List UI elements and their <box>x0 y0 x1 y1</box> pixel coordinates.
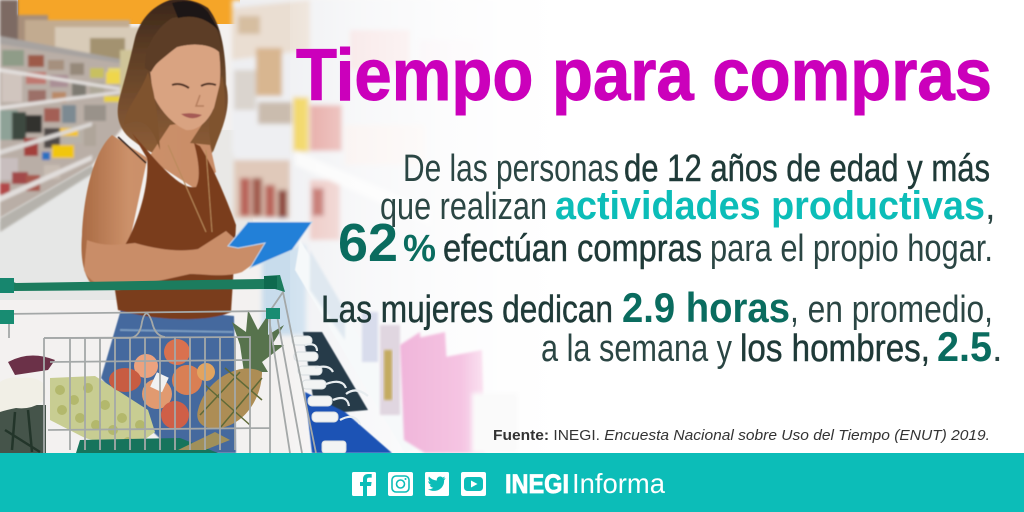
shoulder and chest skin <box>81 120 216 290</box>
text block: hours per week by sex: Las mujeres dedican <box>321 289 613 331</box>
logo: INEGI Informa: INEGI <box>505 469 569 499</box>
text block: productive activities statistic: De las personas <box>403 148 619 190</box>
text block: hours per week by sex <box>321 284 1003 370</box>
orange back wall <box>18 0 240 24</box>
icon: instagram <box>388 472 413 496</box>
back centre shelf <box>120 50 140 120</box>
pineapple <box>197 310 284 429</box>
source note: Fuente: INEGI. Encuesta Nacional sobre Uso del Tiempo (ENUT) 2019. <box>493 428 990 444</box>
text block: hours per week by sex: 2.5 <box>937 323 992 370</box>
floor <box>0 150 130 300</box>
icon: facebook <box>352 472 376 496</box>
forearm <box>84 231 268 290</box>
hair back <box>118 0 228 157</box>
facial features <box>172 84 216 88</box>
face <box>150 45 220 130</box>
necklace <box>168 145 212 232</box>
right shelves <box>232 0 560 453</box>
lilac and yellow products <box>362 312 378 362</box>
text block: hours per week by sex: a la semana y <box>541 328 732 370</box>
apples in bag <box>109 339 215 429</box>
text block: productive activities statistic: que realizan <box>380 186 547 228</box>
icon: youtube <box>461 472 486 496</box>
jeans <box>101 306 236 453</box>
text block: productive activities statistic: , <box>985 186 996 228</box>
blue package <box>228 222 312 268</box>
woman shopper <box>81 0 312 453</box>
lower aisle products: shelf, bottles <box>292 240 518 453</box>
jugs near cart <box>262 245 306 335</box>
white diagonal shelf <box>295 240 425 453</box>
text block: productive activities statistic: % <box>403 228 436 270</box>
cart rods <box>2 292 316 453</box>
text block: productive activities statistic: efectúan compras <box>443 228 702 270</box>
text block: hours per week by sex: los hombres, <box>740 328 930 370</box>
text block: hours per week by sex: 2.9 horas <box>622 284 790 331</box>
text block: productive activities statistic: 62 <box>338 213 398 273</box>
grapes <box>50 376 155 450</box>
text block: hours per week by sex: . <box>992 328 1003 370</box>
hair front and band <box>145 14 220 72</box>
pink bottles <box>400 332 485 453</box>
text block: productive activities statistic: actividades productivas <box>555 184 985 228</box>
left shelf ledges <box>0 36 125 64</box>
strap <box>118 137 146 163</box>
dark recess <box>303 332 368 430</box>
shopping cart with groceries <box>0 275 316 453</box>
knit tank top <box>115 133 236 319</box>
left shelf body <box>0 38 125 218</box>
flowers <box>0 355 55 453</box>
green handle <box>0 275 285 292</box>
green cart base <box>76 438 218 453</box>
white fade overlay behind text <box>290 0 1024 453</box>
logo: INEGI Informa: Informa <box>572 468 666 499</box>
footer band <box>0 453 1024 512</box>
icon: twitter <box>425 472 449 496</box>
text block: productive activities statistic <box>338 148 996 273</box>
logo: INEGI Informa <box>505 468 666 499</box>
blue bottles <box>305 392 392 453</box>
